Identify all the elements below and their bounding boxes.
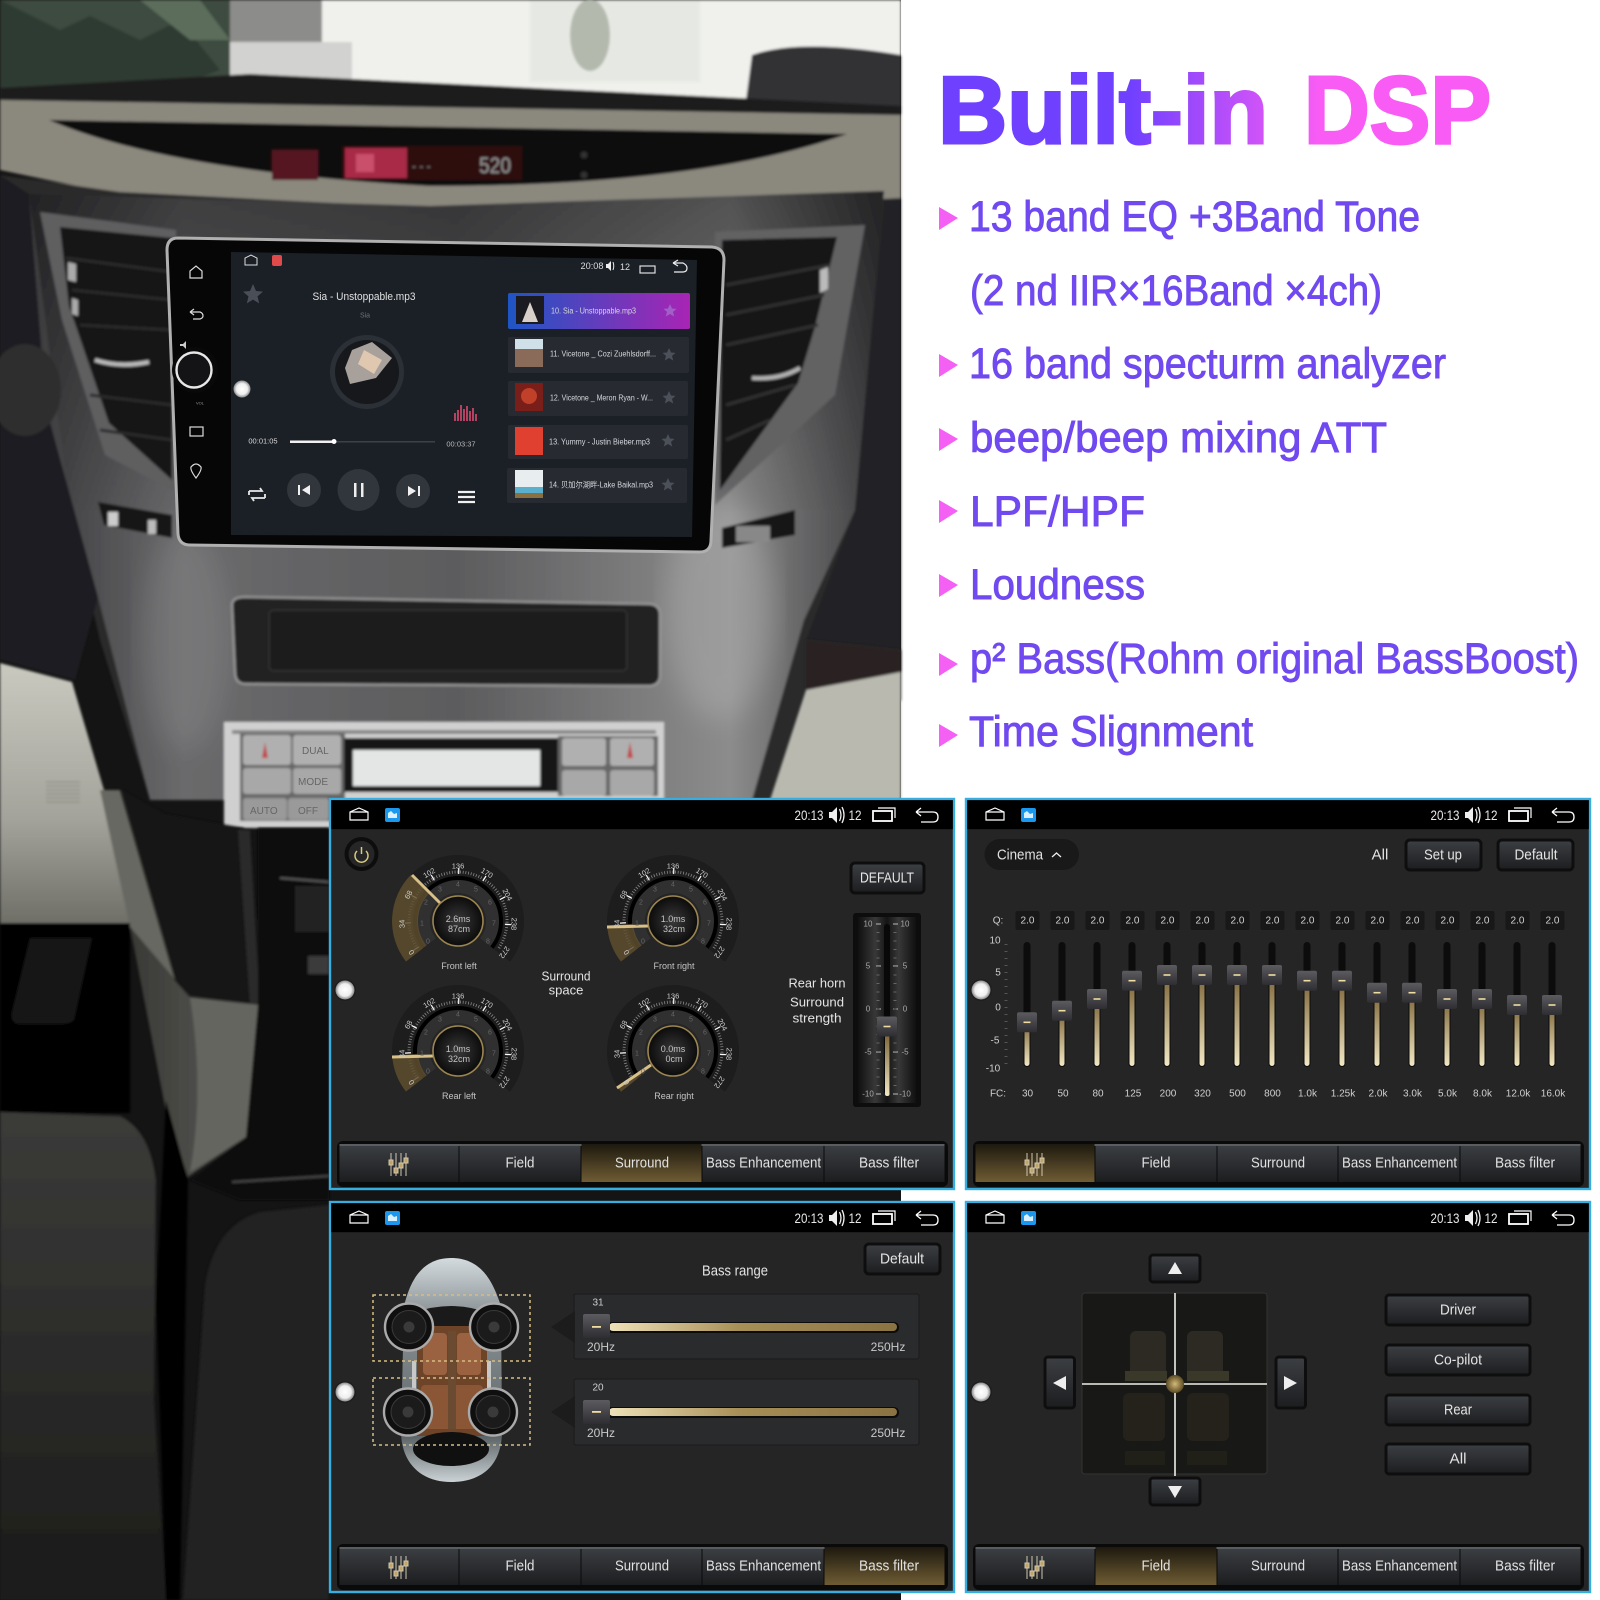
gauge: rear right: 1 (635, 1050, 639, 1058)
gauge: rear left: 0 (426, 1068, 430, 1076)
Q row: 2.0 (1231, 916, 1245, 926)
status bar (350, 1210, 938, 1226)
all button (1386, 1444, 1530, 1474)
gauge: rear left: 1.0ms (446, 1044, 471, 1054)
slider: low range: 20Hz (587, 1426, 615, 1440)
rear button (1386, 1395, 1530, 1425)
tab bar: Field (1142, 1154, 1170, 1172)
Q row: 2.0 (1091, 916, 1105, 926)
lower left trim (0, 663, 130, 923)
gauge: front right: 6 (703, 900, 707, 906)
side switches (98, 502, 172, 538)
slider: low range: 20 (592, 1382, 604, 1394)
FC labels: 3.0k (1403, 1088, 1423, 1100)
gauge: front right: 204 (716, 887, 729, 902)
floating dot (234, 380, 250, 398)
right vent (715, 225, 865, 505)
gauge: front right: 4 (671, 882, 675, 888)
bullet: 13 band EQ: 13 band EQ +3Band Tone (969, 193, 1420, 241)
gauge: front left: 0 (407, 948, 416, 957)
gauge: rear left: 6 (488, 1030, 492, 1036)
tab bar (337, 1544, 948, 1590)
default button: Default (880, 1250, 925, 1268)
Q row: 2.0 (1546, 916, 1560, 926)
bass range label: Bass range (702, 1262, 768, 1280)
bullet: mixing ATT: beep/beep mixing ATT (970, 414, 1387, 462)
gauge: rear left: 4 (456, 1012, 460, 1018)
progress bar: 00:01:05 (248, 436, 278, 446)
gauge: front left: 6 (488, 900, 492, 906)
console side (130, 927, 258, 1177)
vertical slider: 5 (866, 962, 871, 970)
dB scale: -5 (991, 1036, 1000, 1046)
tab bar: Bass Enhancement (1342, 1154, 1458, 1172)
tab bar: Surround (615, 1558, 669, 1574)
default button (865, 1244, 940, 1274)
windshield view (0, 0, 901, 122)
volume knob (172, 341, 218, 406)
all label: All (1372, 846, 1388, 864)
vertical slider (853, 913, 921, 1107)
bullet: LPF/HPF: LPF/HPF (970, 488, 1145, 536)
gauge: rear right: 272 (712, 1075, 727, 1090)
label: rear horn surround strength: Rear horn (788, 976, 846, 990)
slider: high range: 250Hz (871, 1340, 905, 1354)
FC labels: 800 (1264, 1088, 1281, 1100)
status bar: 20:13 (794, 1210, 824, 1226)
gauge: rear left: 32cm (448, 1054, 470, 1064)
tab bar: Surround (1251, 1558, 1305, 1574)
gauge: front right: 68 (618, 889, 629, 901)
gauge: front left: 2.6ms (446, 914, 471, 924)
gauge: rear left: 3 (438, 1016, 442, 1024)
gauge: rear right: 0.0ms (661, 1044, 686, 1054)
Q row: 2.0 (1161, 916, 1175, 926)
gauge: rear left: 7 (492, 1050, 496, 1058)
climate button labels: AUTO (250, 806, 278, 817)
gauge: rear right: 6 (703, 1030, 707, 1036)
bullet continuation: (2 nd IIR×16Band ×4ch) (970, 267, 1382, 315)
gauge: rear right: 7 (707, 1050, 711, 1058)
vertical slider: 5 (903, 962, 908, 970)
gauge: rear left: 204 (501, 1017, 514, 1032)
gauge: front left: 170 (479, 866, 495, 880)
gauge: front left: 4 (456, 882, 460, 888)
FC labels: 2.0k (1369, 1088, 1388, 1100)
FC labels: 320 (1194, 1088, 1211, 1100)
gauge: front right: 1 (635, 920, 639, 928)
slider: low range (551, 1379, 919, 1445)
gauge: front right: 238 (724, 917, 734, 930)
playlist (507, 293, 690, 503)
gauge: rear left: Rear left (442, 1091, 477, 1101)
status bar: 12 (848, 807, 862, 823)
player controls (249, 488, 265, 501)
slider: high range (551, 1294, 919, 1359)
dash top (0, 74, 901, 125)
power button (344, 837, 378, 871)
spectrum (455, 405, 476, 421)
gauge: front right: 272 (712, 945, 727, 960)
FC labels: 1.0k (1298, 1088, 1318, 1100)
FC labels: 5.0k (1438, 1088, 1458, 1100)
tab bar: Bass filter (859, 1154, 919, 1172)
gauge: front right: 3 (653, 886, 657, 894)
gauge: rear right: 0 (622, 1078, 631, 1087)
gauge: rear left (392, 992, 519, 1101)
label: surround space: Surround (542, 968, 590, 984)
gauge: front left: 102 (421, 866, 437, 880)
gauge: front left: 2 (424, 900, 428, 906)
tab bar: Field (506, 1154, 534, 1172)
FC labels: 8.0k (1473, 1088, 1493, 1100)
panel: equalizer (966, 799, 1590, 1189)
feature list (939, 193, 1579, 756)
FC labels: 125 (1125, 1088, 1142, 1100)
gauge: front left: 3 (438, 886, 442, 894)
vertical slider: 0 (903, 1004, 908, 1014)
car dashboard photo (0, 0, 901, 1600)
tab bar: Bass filter (1495, 1558, 1555, 1574)
label: surround space: space (549, 982, 583, 998)
gauge: front right: Front right (653, 961, 695, 971)
gauge: rear right: 102 (636, 996, 652, 1010)
gauge: front left: Front left (441, 961, 477, 971)
title: Built-in (938, 57, 1268, 164)
gauge: front left (397, 862, 519, 971)
car dashboard photo: 520 (479, 153, 511, 178)
head unit screen (167, 238, 724, 552)
gauge: rear right: 8 (701, 1068, 705, 1076)
fascia highlights (665, 500, 775, 720)
gauge: rear left: 238 (509, 1047, 519, 1060)
playlist: 12. Vicetone _ Meron Ryan - W... (550, 394, 653, 402)
vertical slider: -10 (899, 1090, 911, 1098)
gauge: rear right: 68 (618, 1019, 629, 1031)
gauge: front left: 68 (403, 889, 414, 901)
fascia (0, 175, 901, 800)
gauge: front left: 1 (420, 920, 424, 928)
Q row: 2.0 (1476, 916, 1490, 926)
tab bar: Bass filter (1495, 1154, 1555, 1172)
FC labels (990, 1088, 1566, 1100)
gauge: front left: 238 (509, 917, 519, 930)
panel: bass filter (330, 1202, 954, 1592)
rear button: Rear (1444, 1402, 1472, 1418)
Q row: 2.0 (1126, 916, 1140, 926)
all button: All (1450, 1450, 1466, 1468)
gauge: front right: 102 (636, 866, 652, 880)
FC labels: 80 (1092, 1088, 1104, 1100)
gauge: front right: 5 (689, 886, 693, 894)
default button (851, 863, 924, 893)
tab bar: Field (1142, 1558, 1170, 1574)
track title: Sia - Unstoppable.mp3 (312, 291, 416, 303)
arrow button: left (1045, 1357, 1074, 1408)
gauge: rear left: 272 (497, 1075, 512, 1090)
FC labels: 200 (1160, 1088, 1177, 1100)
gauge: rear right: 170 (694, 996, 710, 1010)
status bar: 20:13 (1430, 807, 1460, 823)
volume knob: VOL (196, 400, 205, 406)
Q row: 2.0 (1056, 916, 1070, 926)
dB scale: 5 (995, 968, 1001, 978)
vertical slider: -5 (901, 1048, 909, 1056)
default button: Default (1514, 846, 1558, 864)
climate panel (224, 722, 664, 828)
tab bar (337, 1141, 948, 1187)
left vent (40, 212, 176, 492)
gauge: front left: 0 (426, 938, 430, 946)
vertical slider: 10 (864, 920, 873, 928)
side icons (190, 266, 203, 478)
gauge: front right: 8 (701, 938, 705, 946)
gauge: rear right: 204 (716, 1017, 729, 1032)
gauge: rear right: 238 (724, 1047, 734, 1060)
gauge: rear right: 3 (653, 1016, 657, 1024)
floating dot (970, 979, 992, 1001)
gauge: front left: 204 (501, 887, 514, 902)
climate button labels: OFF (298, 806, 318, 817)
tab bar: Surround (615, 1154, 669, 1172)
gauge: front left: 7 (492, 920, 496, 928)
slider: high range: 20Hz (587, 1340, 615, 1354)
dB scale: 10 (989, 936, 1001, 946)
arrow button: up (1150, 1255, 1200, 1282)
album art (330, 335, 404, 409)
label: surround space (542, 968, 590, 998)
tab bar (973, 1141, 1584, 1187)
dark console (122, 790, 258, 1005)
gauge: rear left: 136 (452, 992, 464, 1000)
Q row: 2.0 (1021, 916, 1035, 926)
co-pilot button (1386, 1345, 1530, 1375)
playlist: 10. Sia - Unstoppable.mp3 (551, 306, 636, 316)
driver button (1386, 1295, 1530, 1325)
FC labels: 50 (1057, 1088, 1069, 1100)
title: DSP (1304, 57, 1491, 164)
head unit screen: 20:08 (580, 261, 604, 271)
Q row: 2.0 (1196, 916, 1210, 926)
gauge: rear right: 136 (667, 992, 679, 1000)
gauge: front right: 0 (622, 948, 631, 957)
gauge: rear right: 0cm (665, 1054, 683, 1064)
Q row: 2.0 (1336, 916, 1350, 926)
Q row: 2.0 (1441, 916, 1455, 926)
bullet: spectrum analyzer: 16 band specturm analyzer (969, 340, 1446, 388)
gauge: front right: 136 (667, 862, 679, 870)
Q row: 2.0 (1406, 916, 1420, 926)
gauge: rear left: 68 (403, 1019, 414, 1031)
gauge: rear right: 2 (639, 1030, 643, 1036)
label: rear horn surround strength (788, 976, 846, 1026)
tab bar: Bass Enhancement (706, 1154, 822, 1172)
status bar: 12 (848, 1210, 862, 1226)
title (938, 57, 1491, 164)
climate button labels (250, 746, 329, 817)
gauge: rear left: 34 (397, 1050, 407, 1058)
seat balance pad (1082, 1293, 1267, 1476)
default button (1498, 840, 1573, 870)
arrow button: right (1276, 1357, 1306, 1408)
gauge: rear right: 4 (671, 1012, 675, 1018)
top status (245, 255, 257, 265)
FC labels: 500 (1229, 1088, 1246, 1100)
tab bar: Bass filter (859, 1558, 919, 1574)
panel: field (966, 1202, 1590, 1592)
label: rear horn surround strength: strength (792, 1010, 842, 1026)
playlist: 13. Yummy - Justin Bieber.mp3 (549, 438, 650, 446)
gauge: rear right: Rear right (654, 1091, 694, 1101)
set up button (1406, 840, 1481, 870)
FC labels: 30 (1022, 1088, 1033, 1100)
Q row: 2.0 (1371, 916, 1385, 926)
status bar (350, 807, 938, 823)
gauge: front right: 7 (707, 920, 711, 928)
FC labels: 1.25k (1331, 1088, 1356, 1100)
console strip (100, 790, 175, 980)
gauge: front right (607, 862, 734, 971)
status bar: 12 (1484, 1210, 1498, 1226)
status bar: 20:13 (1430, 1210, 1460, 1226)
instrument hood (49, 120, 847, 186)
Q row: Q: (993, 916, 1003, 926)
gauge: rear left: 170 (479, 996, 495, 1010)
vertical slider: 10 (901, 920, 910, 928)
climate button labels: DUAL (302, 746, 329, 757)
gauge: front right: 1.0ms (661, 914, 686, 924)
gauge: front right: 34 (612, 920, 622, 928)
FC labels: 16.0k (1541, 1088, 1566, 1100)
slider: low range: 250Hz (871, 1426, 905, 1440)
head unit screen: 00:03:37 (446, 440, 476, 448)
vertical slider: -10 (862, 1090, 874, 1098)
head unit screen: Sia (360, 312, 370, 320)
gauge: front right: 170 (694, 866, 710, 880)
tab bar: Surround (1251, 1154, 1305, 1172)
gauge: rear left: 0 (407, 1078, 416, 1087)
footwell (0, 923, 130, 1113)
arrow button: down (1150, 1478, 1200, 1505)
label: rear horn surround strength: Surround (790, 994, 844, 1010)
gauge: rear left: 5 (474, 1016, 478, 1024)
gauge: rear left: 8 (486, 1068, 490, 1076)
Q row: 2.0 (1266, 916, 1280, 926)
co-pilot button: Co-pilot (1434, 1352, 1483, 1368)
FC labels: FC: (990, 1088, 1006, 1100)
tab bar: Field (506, 1558, 534, 1574)
gauge: front left: 136 (452, 862, 464, 870)
status bar (986, 807, 1574, 823)
tab bar: Bass Enhancement (1342, 1558, 1458, 1574)
status bar (986, 1210, 1574, 1226)
EQ sliders (1017, 942, 1562, 1067)
storage pocket (232, 597, 660, 686)
head unit screen: 12 (620, 262, 630, 272)
bullet: Time alignment: Time Slignment (969, 708, 1253, 756)
star (243, 284, 263, 303)
status bar: 20:13 (794, 807, 824, 823)
gauge: rear right: 34 (612, 1050, 622, 1058)
gauge: front left: 87cm (448, 924, 470, 934)
car dashboard photo: - - - (412, 159, 431, 173)
floating dot (334, 979, 356, 1001)
gauge: rear right: 5 (689, 1016, 693, 1024)
dB scale (986, 936, 1006, 1074)
preset selector (984, 839, 1079, 870)
seats (0, 1112, 166, 1600)
FC labels: 12.0k (1506, 1088, 1531, 1100)
vertical slider: -5 (864, 1048, 872, 1056)
climate button labels: MODE (298, 777, 328, 788)
vertical slider: 0 (866, 1004, 871, 1014)
playlist: 14. 贝加尔湖畔-Lake Baikal.mp3 (549, 480, 653, 490)
Q row (993, 911, 1564, 930)
gauge: rear right (612, 992, 734, 1101)
panel: surround (330, 799, 954, 1189)
tab bar: Bass Enhancement (706, 1558, 822, 1574)
tab bar (973, 1544, 1584, 1590)
Q row: 2.0 (1511, 916, 1525, 926)
dB scale: 0 (995, 1002, 1001, 1014)
playlist: 11. Vicetone _ Cozi Zuehlsdorff... (550, 350, 656, 358)
default button: DEFAULT (860, 870, 914, 886)
dB scale: -10 (986, 1064, 1001, 1074)
gauge: rear left: 1 (420, 1050, 424, 1058)
gauge: front left: 272 (497, 945, 512, 960)
Q row: 2.0 (1301, 916, 1315, 926)
floating dot (970, 1381, 992, 1403)
slider: high range: 31 (592, 1298, 604, 1308)
status bar: 12 (1484, 807, 1498, 823)
bullet: Loudness: Loudness (970, 561, 1145, 609)
gauge: rear right: 0 (641, 1068, 645, 1076)
gauge: rear left: 2 (424, 1030, 428, 1036)
driver button: Driver (1440, 1302, 1476, 1318)
set up button: Set up (1424, 846, 1462, 864)
floating dot (334, 1381, 356, 1403)
gauge: rear left: 102 (421, 996, 437, 1010)
gauge: front right: 32cm (663, 924, 685, 934)
preset selector: Cinema (997, 846, 1044, 864)
gauge: front right: 2 (639, 900, 643, 906)
gauge: front left: 34 (397, 920, 407, 928)
gauge: front left: 5 (474, 886, 478, 894)
car speaker diagram (373, 1258, 530, 1482)
lower console (190, 1005, 329, 1200)
gauge: front right: 0 (641, 938, 645, 946)
gauge: front left: 8 (486, 938, 490, 946)
